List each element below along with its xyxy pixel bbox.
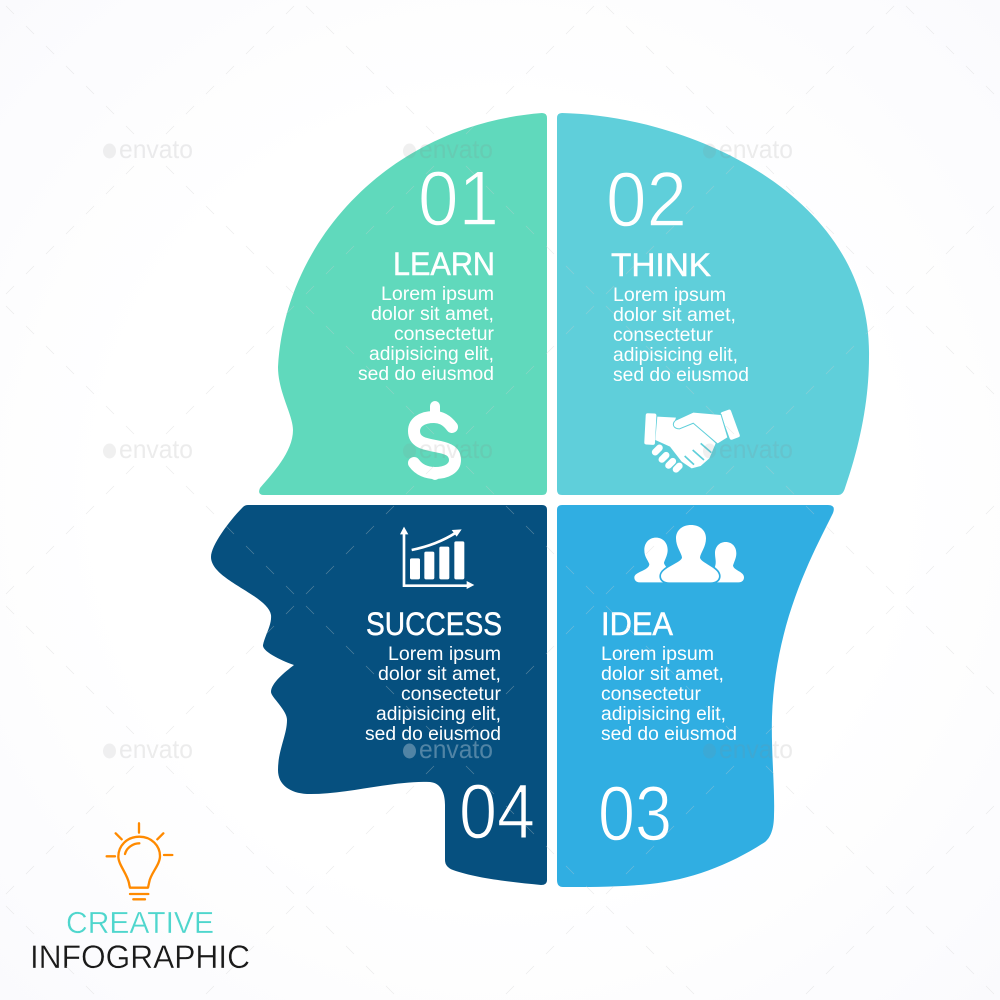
text block: sed do eiusmod [365,724,501,745]
head segment: crown back [259,113,547,495]
text block: Lorem ipsum [381,284,494,305]
text block: dolor sit amet, [371,304,494,325]
head segment: crown front [557,113,869,495]
watermarks [103,134,793,764]
logo: creative infographic [30,823,250,975]
icon: handshake [644,409,740,474]
watermarks: envato [419,134,493,164]
watermarks: envato [119,734,193,764]
head segment: face profile [211,505,547,885]
icon: growth chart [400,527,474,589]
text block: consectetur [394,324,495,345]
watermarks: envato [419,434,493,464]
text block [613,285,749,386]
text block: dolor sit amet, [601,664,724,685]
text block: adipisicing elit, [613,345,738,366]
text block [358,284,495,385]
text block: adipisicing elit, [376,704,501,725]
text block: adipisicing elit, [369,344,494,365]
number 02: 02 [606,155,687,243]
number 01: 01 [418,154,499,242]
heading: success: SUCCESS [366,606,502,642]
panel: 02 think [557,113,869,495]
text block: dolor sit amet, [613,305,736,326]
heading: learn: LEARN [393,246,495,282]
number 03: 03 [598,769,672,857]
text block: Lorem ipsum [613,285,726,306]
icon: people [634,525,744,582]
watermarks: envato [419,734,493,764]
watermarks: envato [719,134,793,164]
wordmark: creative: CREATIVE [66,905,214,940]
text block: sed do eiusmod [358,364,494,385]
text block [601,644,737,745]
text block: consectetur [601,684,702,705]
wordmark: infographic: INFOGRAPHIC [30,939,250,975]
heading: think: THINK [611,247,711,283]
panel: 04 success [211,505,547,885]
text block: dolor sit amet, [378,664,501,685]
head segment: neck [557,505,834,887]
text block: Lorem ipsum [601,644,714,665]
panel: 01 learn [259,113,547,495]
text block [365,644,502,745]
heading: idea: IDEA [601,606,674,642]
panel: 03 idea [557,505,834,887]
text block: sed do eiusmod [613,365,749,386]
text block: consectetur [401,684,502,705]
text block: consectetur [613,325,714,346]
icon: light bulb [107,823,172,899]
icon: dollar sign [414,406,455,475]
watermarks: envato [719,734,793,764]
text block: adipisicing elit, [601,704,726,725]
text block: sed do eiusmod [601,724,737,745]
watermarks: envato [719,434,793,464]
watermarks: envato [119,134,193,164]
number 04: 04 [459,767,535,855]
text block: Lorem ipsum [388,644,501,665]
watermarks: envato [119,434,193,464]
